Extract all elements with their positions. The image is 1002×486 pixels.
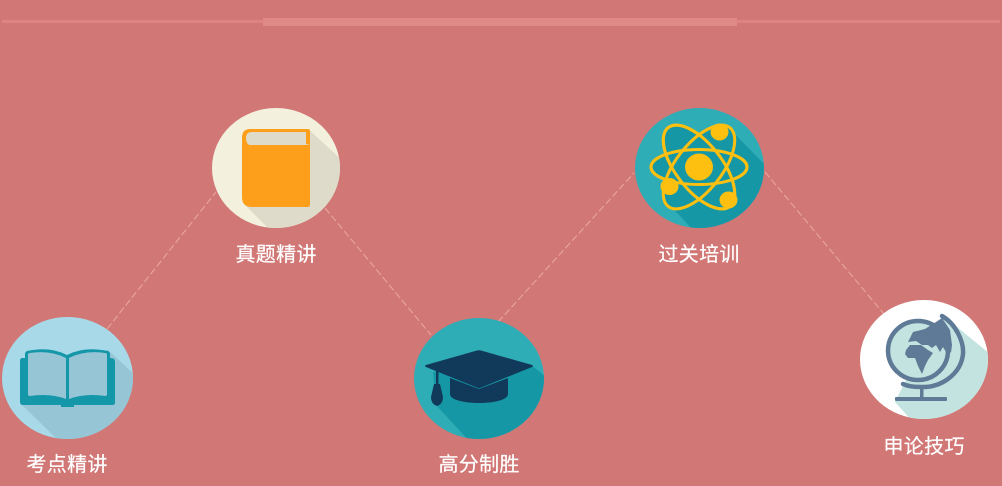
label: 过关培训 bbox=[658, 243, 740, 266]
icon: open book bbox=[2, 317, 136, 442]
label: 高分制胜 bbox=[438, 453, 520, 476]
icon: graduation cap bbox=[414, 318, 546, 442]
label: 申论技巧 bbox=[884, 435, 965, 458]
node: 申论技巧 bbox=[860, 300, 990, 458]
label: 真题精讲 bbox=[236, 243, 317, 266]
icon: closed book bbox=[212, 108, 342, 230]
node: 过关培训 bbox=[635, 108, 766, 266]
icon: globe bbox=[860, 300, 990, 421]
label: 考点精讲 bbox=[26, 453, 108, 476]
node: 高分制胜 bbox=[414, 318, 546, 476]
node: 考点精讲 bbox=[2, 317, 136, 476]
icon: atom bbox=[635, 108, 766, 231]
node: 真题精讲 bbox=[212, 108, 342, 266]
